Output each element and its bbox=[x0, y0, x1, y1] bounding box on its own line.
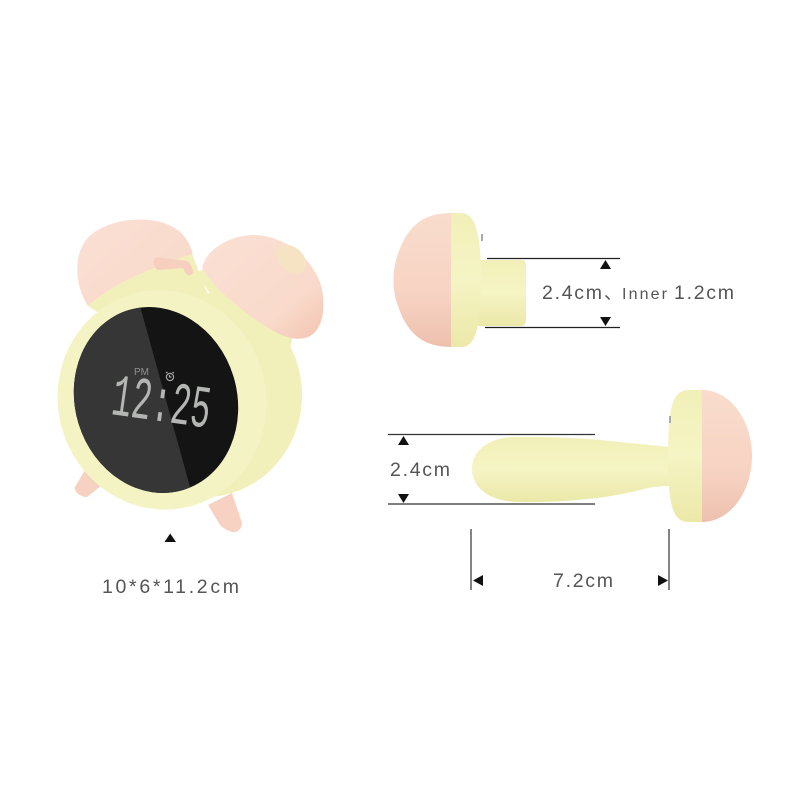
arrow down bbox=[600, 317, 611, 326]
hammer bbox=[154, 257, 204, 292]
clock back body bbox=[108, 293, 302, 497]
bottom knob bbox=[472, 390, 752, 522]
size value: 2.4cm bbox=[542, 282, 602, 304]
handle bbox=[472, 437, 670, 502]
head pink bbox=[702, 390, 752, 522]
inner value: 1.2cm bbox=[674, 282, 734, 304]
foot left bbox=[75, 470, 102, 497]
top dimension text bbox=[542, 279, 734, 305]
time display bbox=[107, 365, 215, 446]
arrow right bbox=[658, 575, 668, 586]
top knob bbox=[394, 213, 526, 347]
arrow up bbox=[398, 436, 409, 445]
foot right bbox=[208, 493, 242, 532]
height label: 2.4cm bbox=[390, 459, 450, 481]
arrow left bbox=[473, 575, 483, 586]
bottom height lines bbox=[388, 434, 595, 504]
pin bbox=[481, 234, 483, 241]
bell button bbox=[270, 239, 312, 279]
alarm clock product image bbox=[33, 219, 323, 533]
alarm icon bbox=[166, 372, 174, 381]
clock face bbox=[74, 307, 238, 493]
head yellow bbox=[668, 390, 702, 522]
separator: 、 bbox=[604, 279, 622, 305]
stem bbox=[478, 260, 526, 326]
pin bbox=[669, 416, 671, 423]
length label: 7.2cm bbox=[553, 570, 613, 592]
clock size label: 10*6*11.2cm bbox=[102, 576, 239, 598]
arrow up bbox=[600, 260, 611, 269]
arrow down bbox=[398, 494, 409, 503]
left bell bbox=[77, 219, 210, 320]
head yellow bbox=[451, 213, 481, 347]
length dimension bbox=[471, 529, 669, 590]
PM label: PM bbox=[134, 367, 149, 378]
top dimension lines bbox=[485, 258, 620, 328]
digits: 12:25 bbox=[107, 365, 215, 446]
head pink bbox=[394, 213, 451, 347]
inner label: Inner bbox=[622, 286, 668, 303]
clock front ring bbox=[33, 267, 291, 533]
right bell bbox=[198, 235, 323, 355]
arrow under clock bbox=[164, 534, 176, 542]
